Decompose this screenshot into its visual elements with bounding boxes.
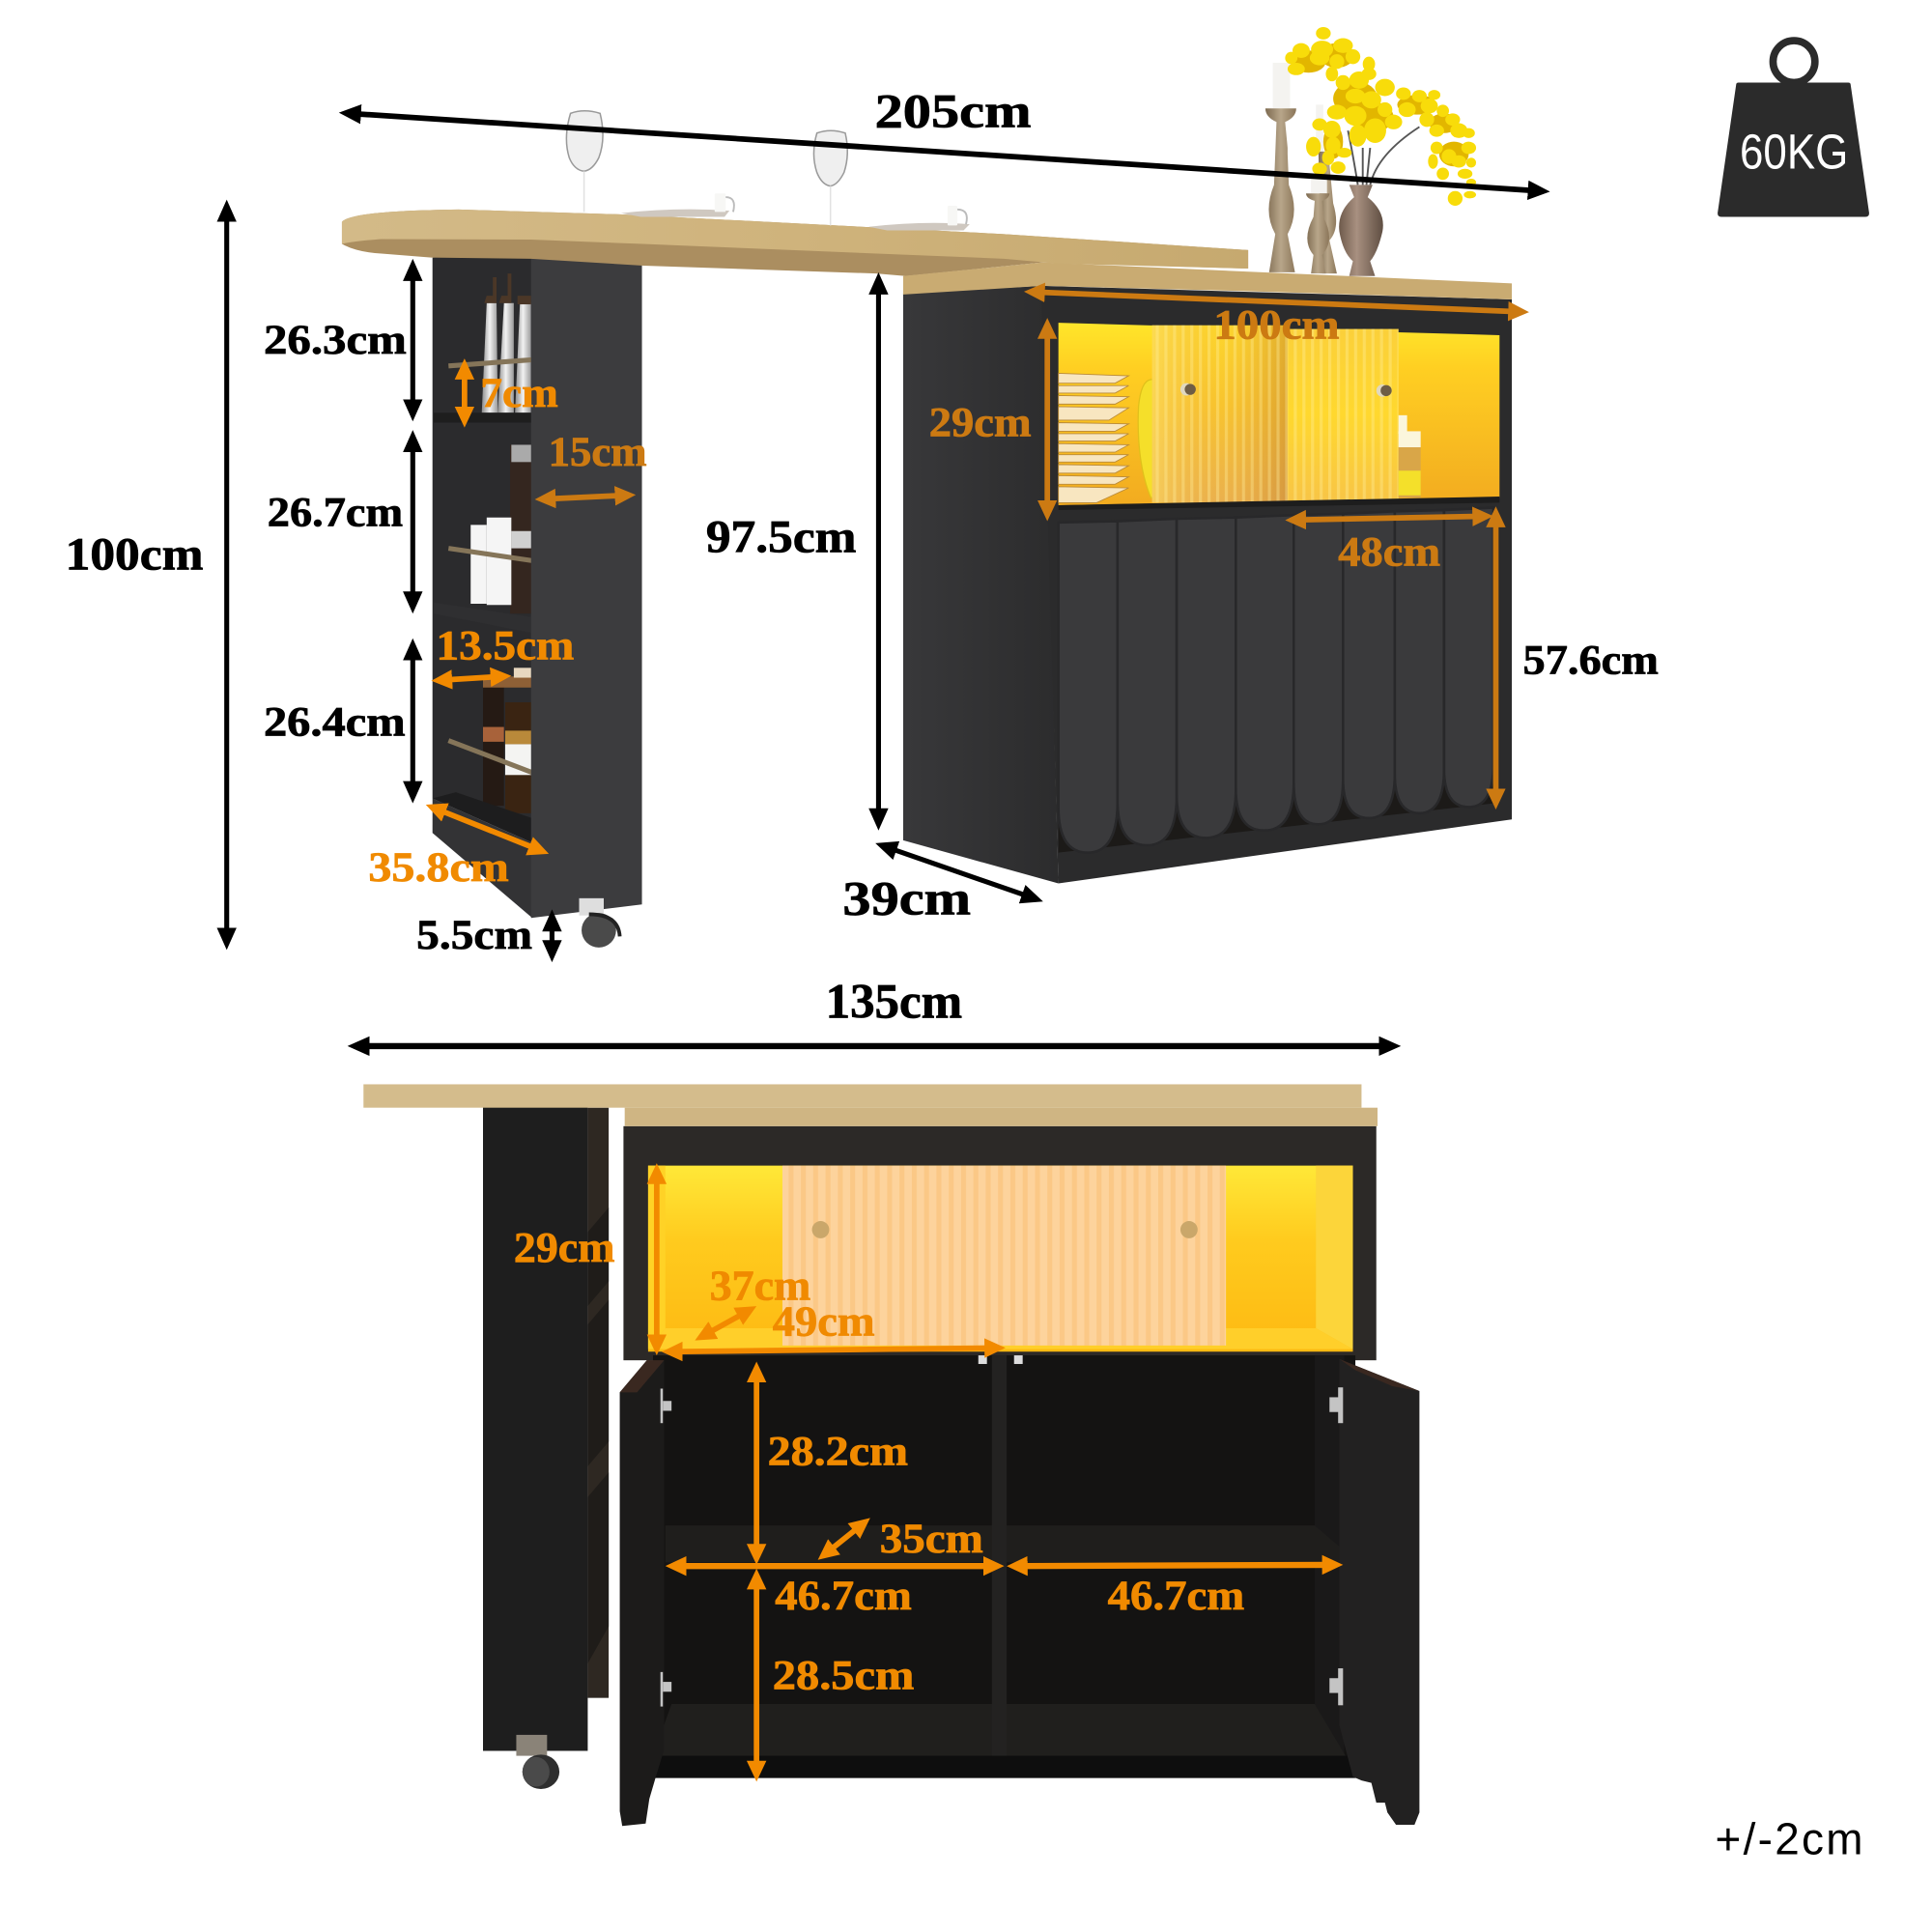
arrow: 15cm <box>545 496 626 499</box>
candle holder small <box>1306 179 1329 273</box>
arrow: 46.7cm left <box>675 1564 994 1569</box>
label: 205cm: 205cm <box>875 84 1032 137</box>
plate stack <box>1059 373 1128 502</box>
arrow: 100cm height <box>225 210 229 940</box>
hinges <box>661 1387 1343 1707</box>
lit niche <box>648 1166 1353 1351</box>
upper shelf <box>666 1525 1341 1562</box>
pedestal caster <box>516 1735 559 1789</box>
label: 28.5cm: 28.5cm <box>773 1653 914 1699</box>
arrow: 13.5cm <box>441 676 501 680</box>
bottom view: open cabinet front <box>363 1084 1419 1826</box>
plate and cup left <box>621 193 734 216</box>
wine glass right <box>813 130 847 225</box>
caster <box>579 898 620 948</box>
label: 57.6cm: 57.6cm <box>1523 638 1659 684</box>
arrow: 28.2cm <box>754 1372 758 1555</box>
arrow: 7cm <box>463 368 467 417</box>
candle holder back <box>1316 104 1337 273</box>
open lit niche <box>1059 323 1499 505</box>
jar <box>510 444 532 613</box>
arrow: 100cm cabinet width <box>1034 292 1520 312</box>
arrow: 135cm <box>357 1043 1391 1048</box>
cabinet side panel <box>903 286 1059 884</box>
fluted glass door right <box>1288 329 1399 500</box>
floor <box>653 1704 1346 1756</box>
cabinet front frame <box>1041 286 1512 884</box>
tall column side panel <box>531 237 642 918</box>
label: 100cm height: 100cm <box>66 529 203 580</box>
label: 39cm: 39cm <box>842 871 971 924</box>
label: 46.7cm right: 46.7cm <box>1108 1573 1244 1619</box>
upper table top <box>342 210 1248 276</box>
arrow: 26.4cm <box>411 648 414 793</box>
arrow: 49cm <box>671 1348 996 1351</box>
vase <box>1339 185 1383 276</box>
top view: bar table with cabinet <box>342 27 1512 948</box>
shelf 1 <box>434 412 533 423</box>
small bottle <box>1399 415 1421 497</box>
label: 48cm: 48cm <box>1338 528 1440 575</box>
arrow: 57.6cm <box>1493 516 1498 800</box>
arrow: 5.5cm <box>550 920 554 952</box>
niche left side <box>648 1166 666 1350</box>
left door <box>620 1360 665 1826</box>
lower cabinet gap <box>1059 754 1493 853</box>
label: 26.4cm: 26.4cm <box>264 698 406 745</box>
arrow: 29cm niche <box>1045 327 1049 511</box>
label: 35cm: 35cm <box>880 1516 983 1562</box>
flowers <box>1285 27 1476 206</box>
knob left <box>812 1221 829 1238</box>
lower interior <box>653 1355 1361 1778</box>
niche floor <box>648 1328 1353 1350</box>
label: 135cm: 135cm <box>826 976 962 1030</box>
label: 28.2cm: 28.2cm <box>768 1429 908 1475</box>
arrow: 97.5cm <box>876 282 880 820</box>
arrow: 28.5cm <box>754 1578 758 1772</box>
label: 26.7cm: 26.7cm <box>268 490 403 536</box>
arrow: 35.8cm <box>435 809 540 850</box>
arrow: 37cm depth <box>703 1311 748 1336</box>
label: 35.8cm: 35.8cm <box>368 844 509 891</box>
pedestal side shelves <box>587 1108 609 1698</box>
label: 97.5cm: 97.5cm <box>706 512 856 562</box>
label: 13.5cm: 13.5cm <box>437 622 574 668</box>
arrow: 48cm <box>1295 516 1484 520</box>
centre divider <box>992 1355 1007 1756</box>
pitcher <box>1138 380 1161 497</box>
arrow: 26.3cm <box>411 269 414 412</box>
arrow: 205cm width <box>349 113 1540 191</box>
label: 100cm cabinet: 100cm <box>1213 302 1339 349</box>
fluted glass door left <box>1152 326 1288 502</box>
icon: 60KG weight <box>1718 41 1869 216</box>
candle holder tall <box>1265 63 1296 272</box>
label: 7cm: 7cm <box>480 370 558 416</box>
pedestal <box>483 1106 587 1750</box>
upper table board <box>363 1084 1361 1108</box>
side wall right <box>1315 1355 1345 1756</box>
door knob right <box>1377 384 1392 397</box>
label: 60KG: 60KG <box>1740 125 1848 180</box>
front base panel <box>433 799 532 918</box>
arrow: 26.7cm <box>411 440 414 604</box>
label: 29cm niche: 29cm <box>929 400 1032 446</box>
screws <box>979 1355 1023 1364</box>
knob right <box>1180 1221 1198 1238</box>
whisky bottles <box>483 668 532 813</box>
label: 29cm pedestal: 29cm <box>514 1223 614 1271</box>
plate and cup right <box>868 206 970 231</box>
arrow: 29cm bottom niche <box>655 1173 659 1346</box>
white canisters <box>470 518 511 605</box>
arrow: 35cm depth <box>826 1524 863 1553</box>
label: 46.7cm left: 46.7cm <box>775 1573 912 1619</box>
label: 15cm: 15cm <box>549 429 647 475</box>
wine glass left <box>566 111 603 212</box>
fluted scalloped door panels <box>1059 508 1493 853</box>
label: 26.3cm: 26.3cm <box>264 317 407 363</box>
label: 49cm: 49cm <box>773 1297 875 1346</box>
arrow: 46.7cm right <box>1016 1565 1333 1566</box>
right door <box>1339 1359 1419 1825</box>
label: 5.5cm: 5.5cm <box>416 912 532 958</box>
top bottles <box>482 273 531 412</box>
niche right side <box>1316 1166 1353 1350</box>
shelf 2 <box>434 603 533 634</box>
tall shelf column: shelf interior <box>433 252 533 918</box>
label: tolerance: +/-2cm <box>1716 1814 1863 1864</box>
arrow: 39cm <box>885 846 1034 898</box>
fluted glass doors <box>782 1166 1226 1346</box>
label: 37cm: 37cm <box>710 1262 810 1310</box>
shelf rails <box>448 359 532 773</box>
niche floor <box>1059 497 1499 510</box>
base band <box>653 1756 1361 1778</box>
bottom shelf floor <box>433 792 532 842</box>
cabinet frame <box>623 1126 1377 1360</box>
door knob left <box>1180 384 1196 395</box>
lower cabinet board <box>625 1108 1378 1126</box>
lower cabinet top <box>903 263 1512 299</box>
